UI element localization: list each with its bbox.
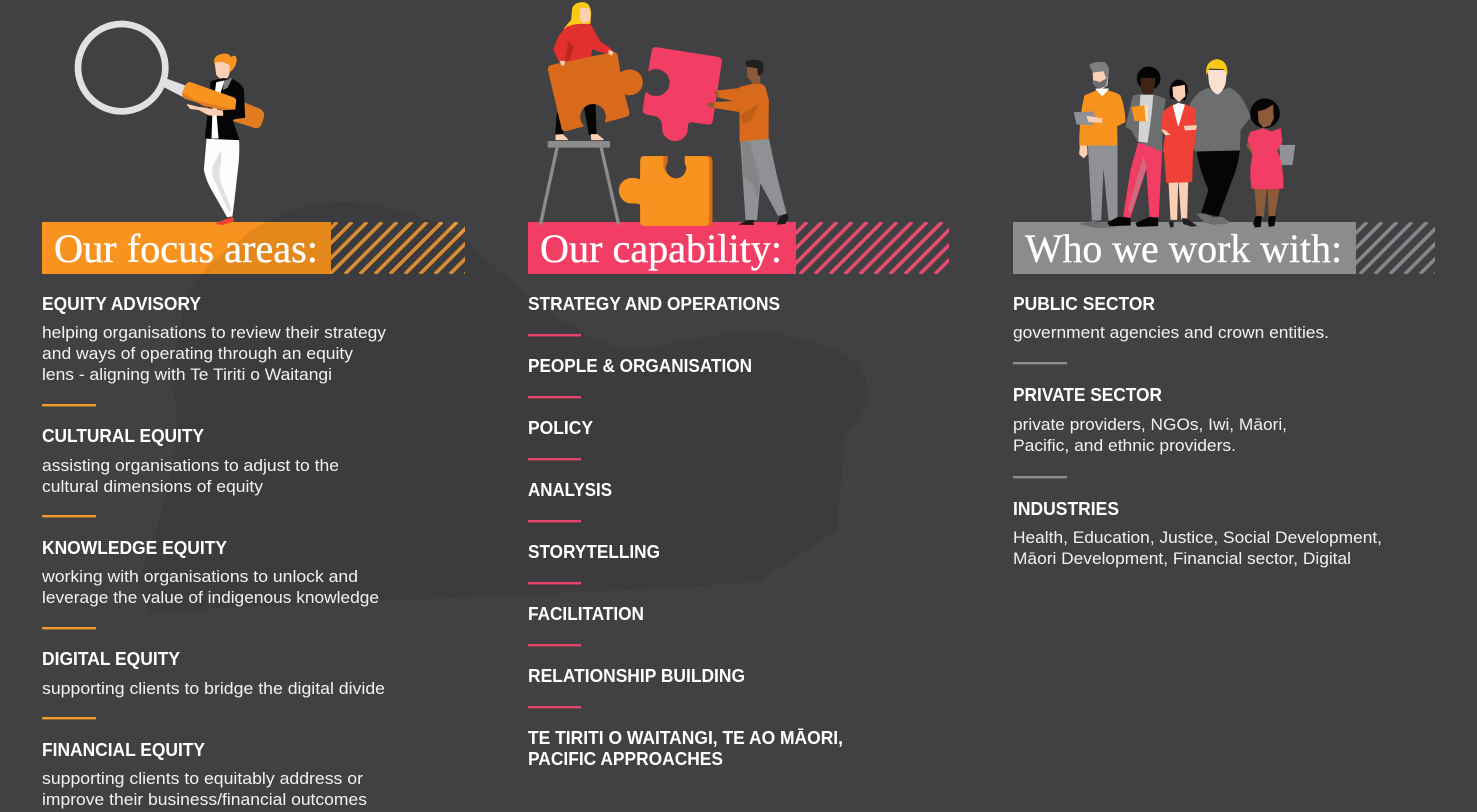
- banner title: our focus areas: Our focus areas:: [54, 226, 318, 271]
- illustration: group of people: [1074, 60, 1295, 228]
- item: cultural equity: assisting organisations to adjust to the: [42, 456, 339, 475]
- item: financial equity: supporting clients to equitably address or: [42, 769, 363, 788]
- item: equity advisory: helping organisations to review their strategy: [42, 323, 387, 342]
- item: digital equity: [42, 649, 385, 698]
- banner title: who we work with: Who we work with:: [1025, 226, 1342, 271]
- item: knowledge equity: KNOWLEDGE EQUITY: [42, 538, 227, 558]
- person 5: [1247, 99, 1295, 227]
- item: digital equity: supporting clients to bridge the digital divide: [42, 679, 385, 698]
- man sweater: [740, 84, 768, 141]
- item: cultural equity: [42, 426, 339, 496]
- hands: [560, 51, 613, 65]
- item: storytelling: STORYTELLING: [528, 542, 660, 562]
- handle front: [183, 83, 236, 110]
- person 2: [1108, 67, 1165, 226]
- panel: who we work with: [1013, 294, 1382, 568]
- item: equity advisory: and ways of operating through an equity: [42, 344, 354, 363]
- man shoes: [738, 213, 789, 225]
- banner: who we work with: [1013, 222, 1477, 274]
- item: te tiriti: TE TIRITI O WAITANGI, TE AO MĀORI,: [528, 728, 843, 748]
- puzzle piece pink: [643, 48, 721, 141]
- item: equity advisory: lens - aligning with Te Tiriti o Waitangi: [42, 365, 332, 384]
- man hands: [707, 92, 718, 107]
- banner: capability: [528, 222, 949, 274]
- lapel and shirt: [212, 81, 224, 138]
- item: knowledge equity: [41, 538, 379, 607]
- item: financial equity: improve their business/financial outcomes: [42, 790, 367, 809]
- item: public sector: government agencies and crown entities.: [1013, 323, 1329, 342]
- icon: magnifier ring: [78, 24, 165, 111]
- icon: magnifier stem: [164, 79, 187, 97]
- item: equity advisory: EQUITY ADVISORY: [42, 294, 201, 314]
- item: financial equity: FINANCIAL EQUITY: [42, 740, 205, 760]
- hair: [214, 54, 236, 71]
- face: [215, 62, 229, 81]
- item: private sector: Pacific, and ethnic providers.: [1013, 436, 1236, 455]
- panel: capability: [528, 294, 843, 769]
- item: strategy and operations: STRATEGY AND OPERATIONS: [528, 294, 780, 314]
- red sweater: [554, 24, 612, 63]
- item: private sector: PRIVATE SECTOR: [1013, 385, 1162, 405]
- trousers: [204, 139, 239, 217]
- item: policy: POLICY: [528, 418, 593, 438]
- banner title: our capability: Our capability:: [540, 226, 782, 271]
- puzzle piece orange: [619, 156, 712, 225]
- handle back end: [233, 100, 264, 128]
- person 3: [1162, 80, 1197, 228]
- item: private sector: private providers, NGOs, Iwi, Māori,: [1013, 415, 1287, 434]
- item: cultural equity: cultural dimensions of equity: [42, 477, 263, 496]
- item: industries: INDUSTRIES: [1013, 499, 1119, 519]
- watermark shape: [138, 202, 868, 613]
- sleeve: [223, 107, 245, 119]
- item: digital equity: DIGITAL EQUITY: [42, 649, 180, 669]
- item: te tiriti: PACIFIC APPROACHES: [528, 749, 723, 769]
- puzzle piece dark orange: [548, 53, 642, 131]
- item: equity advisory: [42, 294, 387, 384]
- man trousers: [741, 138, 786, 219]
- item: public sector: [1013, 294, 1329, 342]
- banner: focus areas: [42, 222, 465, 274]
- feet: [556, 135, 603, 140]
- item: te tiriti: [528, 728, 843, 769]
- item: industries: Māori Development, Financial sector, Digital: [1013, 549, 1351, 568]
- item: financial equity: [42, 740, 367, 809]
- item: industries: [1013, 499, 1382, 568]
- legs: [556, 100, 596, 135]
- hair: [564, 3, 591, 29]
- jacket: [205, 79, 245, 140]
- illustration: woman with magnifying glass: [78, 24, 264, 225]
- item: analysis: ANALYSIS: [528, 480, 612, 500]
- item: people and organisation: PEOPLE & ORGANISATION: [528, 356, 752, 376]
- face: [581, 8, 590, 23]
- item: knowledge equity: leverage the value of indigenous knowledge: [42, 588, 379, 607]
- panel: focus areas: [41, 294, 387, 809]
- man head: [747, 67, 760, 83]
- shoe: [216, 217, 234, 225]
- icon: stool: [541, 141, 618, 223]
- item: cultural equity: CULTURAL EQUITY: [42, 426, 204, 446]
- hand: [187, 105, 223, 115]
- item: industries: Health, Education, Justice, Social Development,: [1013, 528, 1382, 547]
- item: knowledge equity: working with organisations to unlock and: [41, 567, 358, 586]
- item: public sector: PUBLIC SECTOR: [1013, 294, 1155, 314]
- person 4: [1190, 60, 1251, 225]
- item: relationship building: RELATIONSHIP BUILDING: [528, 666, 745, 686]
- item: private sector: [1013, 385, 1287, 455]
- person 1: [1074, 62, 1125, 228]
- illustration: people with puzzle pieces: [541, 3, 789, 225]
- item: facilitation: FACILITATION: [528, 604, 644, 624]
